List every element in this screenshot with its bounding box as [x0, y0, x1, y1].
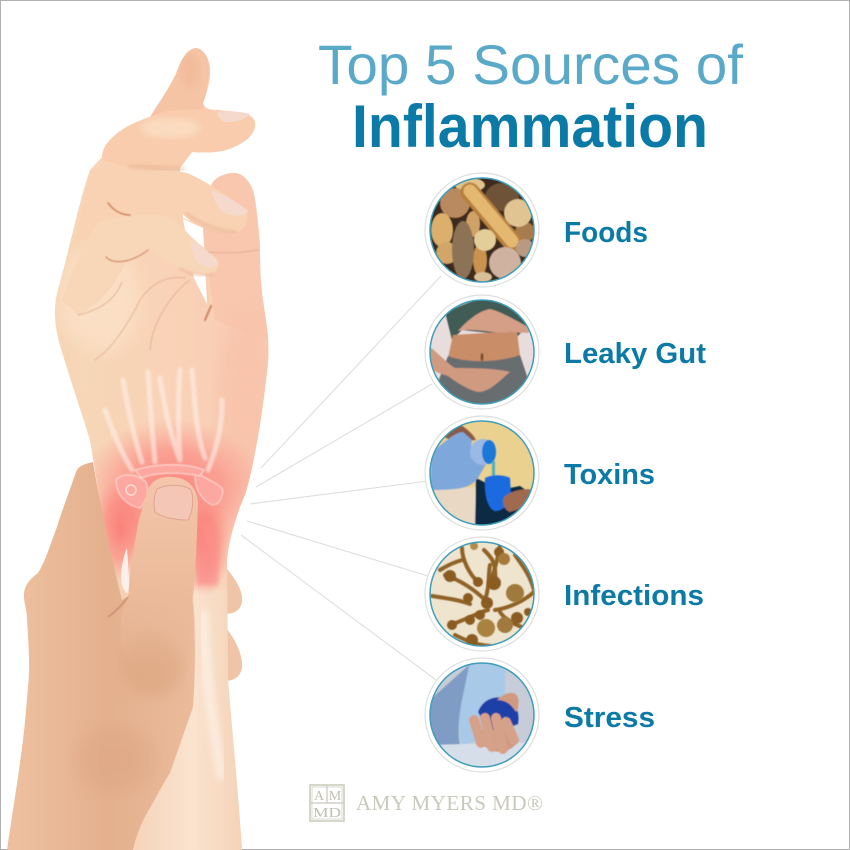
icon: belly: [425, 295, 539, 409]
icon: stress ball: [425, 658, 539, 772]
glow: [94, 424, 250, 541]
label: Foods: [564, 217, 648, 249]
upper hand and forearm: [55, 48, 273, 850]
illustration: hands with inflamed wrist: [7, 48, 273, 850]
gap nail: [121, 548, 130, 594]
right finger: [204, 173, 264, 322]
creases: [78, 203, 258, 360]
back finger: [150, 48, 209, 117]
item: foods: [425, 173, 648, 287]
title line 1: Top 5 Sources of: [318, 33, 743, 96]
forearm tone: [149, 590, 242, 850]
metacarpal bones: [105, 370, 222, 470]
holding hand: [7, 462, 198, 850]
icon: microbes: [425, 537, 539, 651]
thumb crease: [108, 597, 128, 617]
icon: bread: [425, 173, 539, 287]
fingers and nails: [62, 109, 258, 360]
title: [318, 33, 743, 160]
item: leaky gut: [425, 295, 706, 409]
fingers behind forearm: [224, 565, 242, 681]
item: stress: [425, 658, 655, 772]
icon: detergent: [425, 416, 540, 530]
item: toxins: [425, 416, 655, 530]
finger shadows: [130, 165, 235, 275]
fourth finger: [62, 215, 218, 315]
logo mark: MD: [313, 806, 341, 821]
logo wordmark: AMY MYERS MD®: [356, 791, 543, 815]
label: Stress: [564, 702, 655, 734]
logo mark: A: [314, 789, 325, 804]
thumb: [120, 477, 198, 700]
white gap between fingers: [183, 219, 207, 304]
logo: [310, 785, 543, 821]
side tones: [62, 257, 138, 352]
nails: [191, 111, 250, 267]
thumb nail: [154, 485, 193, 520]
wrist bones: [116, 465, 223, 508]
title line 2: Inflammation: [352, 93, 708, 160]
forearm highlights: [194, 540, 220, 587]
label: Infections: [564, 580, 704, 612]
label: Leaky Gut: [564, 338, 706, 370]
logo mark: [310, 785, 344, 821]
third finger: [75, 165, 247, 240]
label: Toxins: [564, 459, 655, 491]
logo mark: M: [329, 789, 342, 804]
second finger: [102, 109, 255, 168]
item: infections: [425, 537, 704, 651]
connector lines: [241, 276, 441, 680]
